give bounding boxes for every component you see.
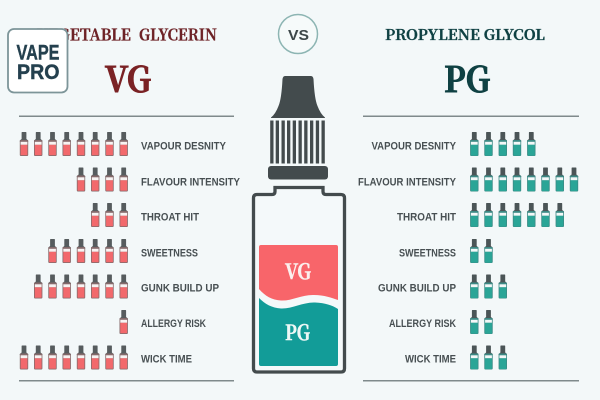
heading: PG: PG [444, 53, 490, 103]
cap base [268, 166, 328, 180]
row: sweetness PG [399, 239, 493, 263]
heading: vegetable glycerin: VEGETABLE [37, 22, 131, 46]
row: flavour intensity VG [77, 168, 241, 192]
bottle cap [271, 76, 325, 118]
heading: propylene glycol: PROPYLENE GLYCOL [385, 24, 545, 45]
row: vapour density PG: VAPOUR DESNITY [372, 140, 457, 152]
logo: vape pro: PRO [17, 61, 60, 84]
VG liquid [259, 245, 338, 301]
row: sweetness VG: SWEETNESS [141, 248, 198, 260]
row: gunk build up VG: GUNK BUILD UP [141, 282, 219, 294]
vs badge: VS [288, 27, 309, 44]
row: sweetness PG: SWEETNESS [399, 248, 456, 260]
row: wick time PG [405, 346, 507, 370]
row: flavour intensity VG: FLAVOUR INTENSITY [141, 176, 241, 188]
row: throat hit VG [91, 203, 199, 227]
VG label: VG [285, 256, 311, 286]
row: flavour intensity PG: FLAVOUR INTENSITY [358, 176, 457, 188]
PG label: PG [285, 317, 310, 347]
row: wick time VG [20, 346, 192, 370]
logo: vape pro [8, 29, 68, 92]
heading: VG: VG [105, 53, 151, 103]
row: throat hit PG [397, 203, 564, 227]
logo: vape pro: VAPE [16, 42, 60, 64]
bottle outline [254, 188, 344, 372]
row: gunk build up VG [34, 274, 219, 298]
row: wick time PG: WICK TIME [405, 354, 456, 366]
row: allergy risk VG: ALLERGY RISK [141, 318, 206, 330]
row: flavour intensity PG [358, 168, 578, 192]
PG liquid [259, 298, 338, 366]
vs badge [278, 14, 318, 54]
row: vapour density VG [20, 132, 227, 156]
row: vapour density PG [372, 132, 536, 156]
heading: vegetable glycerin [37, 22, 217, 46]
row: vapour density VG: VAPOUR DESNITY [141, 140, 227, 152]
central bottle [254, 76, 344, 372]
row: wick time VG: WICK TIME [141, 354, 192, 366]
row: throat hit PG: THROAT HIT [397, 212, 456, 224]
row: allergy risk PG: ALLERGY RISK [389, 318, 456, 330]
row: gunk build up PG: GUNK BUILD UP [378, 282, 456, 294]
heading: vegetable glycerin: GLYCERIN [139, 22, 217, 46]
cap ribs [270, 120, 325, 164]
row: gunk build up PG [378, 274, 507, 298]
row: allergy risk PG [389, 310, 493, 334]
row: allergy risk VG [120, 310, 206, 334]
row: sweetness VG [48, 239, 198, 263]
row: throat hit VG: THROAT HIT [141, 212, 199, 224]
